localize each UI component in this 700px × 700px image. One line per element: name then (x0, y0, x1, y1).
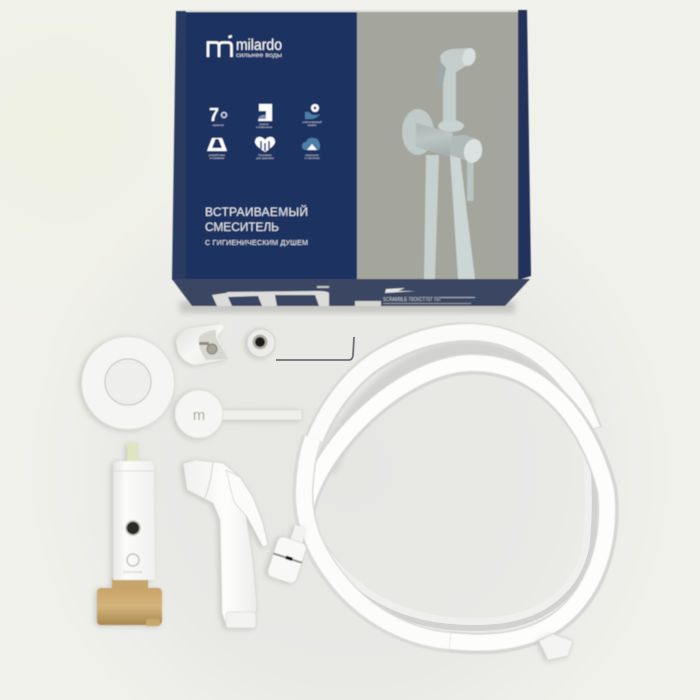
faucet spray nozzle (460, 47, 478, 67)
hose lower left coil (303, 438, 450, 642)
shower threaded end (226, 612, 256, 628)
icon: faucet (256, 104, 272, 129)
flap brand mark (383, 288, 475, 304)
icon: service hand and gear (302, 104, 322, 127)
icon: cloud leak protection (302, 138, 320, 160)
hose upper outer coil (304, 333, 592, 500)
icon: service hand and gear: сервис (308, 123, 317, 127)
shower seam (205, 462, 213, 498)
faucet right hose (450, 155, 475, 279)
cartridge stem (127, 443, 138, 462)
brass valve body (97, 578, 162, 626)
milardo logo: milardo (236, 37, 282, 54)
icon: heart: для здоровья (256, 156, 274, 160)
faucet left hose (424, 155, 439, 279)
hose end connector (539, 634, 573, 660)
box right flap (516, 10, 531, 280)
milardo logo: сильнее воды (236, 52, 282, 59)
product box (172, 10, 531, 313)
mixer cartridge (97, 443, 162, 626)
icon: heart: безопасно (258, 153, 272, 157)
product headline (205, 204, 308, 247)
icon: cloud leak protection: от протечки (304, 156, 320, 160)
navy panel (186, 12, 357, 279)
hose coil shadow band (325, 350, 585, 470)
box top edge (186, 10, 518, 12)
icon: service hand and gear: ответственный (302, 120, 322, 124)
product headline: С ГИГИЕНИЧЕСКИМ ДУШЕМ (205, 238, 308, 247)
icon: 7 year warranty (209, 105, 226, 127)
cartridge body (113, 461, 155, 580)
faucet spray trigger (436, 62, 446, 87)
hose inner coil (304, 364, 608, 644)
icon: faucet: кресло (260, 122, 269, 126)
icon grid (207, 104, 322, 160)
icon: developed in Germany: разработано (209, 153, 226, 157)
faucet wall plate (402, 109, 434, 155)
icon: faucet: и комплекта (256, 125, 272, 129)
cartridge badge (123, 554, 143, 574)
hand shower (183, 460, 268, 628)
faucet lever (467, 160, 474, 201)
lever handle (175, 390, 302, 438)
milardo logo (208, 35, 282, 59)
icon: 7 year warranty: 7 (209, 105, 219, 125)
hex key (276, 337, 354, 360)
cartridge port (126, 521, 140, 535)
hose far turn (322, 378, 592, 625)
box left flap (172, 11, 186, 280)
escutcheon ring (82, 336, 174, 430)
faucet bracket (438, 120, 464, 132)
large m logo on flap (212, 291, 329, 306)
product headline: СМЕСИТЕЛЬ (205, 220, 279, 234)
shower trigger (226, 470, 268, 547)
hose holder bracket (176, 324, 228, 365)
lever handle: m (193, 407, 205, 424)
icon: developed in Germany (207, 138, 227, 160)
faucet spray handle (440, 48, 475, 122)
faucet end cap (450, 135, 482, 163)
box bottom flap (172, 279, 530, 306)
grey photo panel (357, 12, 518, 279)
icon: 7 year warranty: гарантия (212, 123, 224, 127)
shower hose (303, 332, 608, 644)
faucet illustration (402, 47, 484, 279)
mounting nut (247, 329, 275, 357)
flap brand mark: SCRAMBLE 70CKCT707 707 (383, 297, 441, 303)
cartridge badge: ECOLOGICAL (123, 570, 143, 574)
icon: cloud leak protection: защищено (305, 153, 319, 157)
faucet body cylinder (416, 123, 453, 157)
icon: developed in Germany: в германии (210, 156, 225, 160)
icon: heart (255, 137, 275, 160)
box shadow (180, 301, 515, 313)
hose swivel nut (266, 521, 312, 585)
product headline: ВСТРАИВАЕМЫЙ (205, 204, 308, 219)
